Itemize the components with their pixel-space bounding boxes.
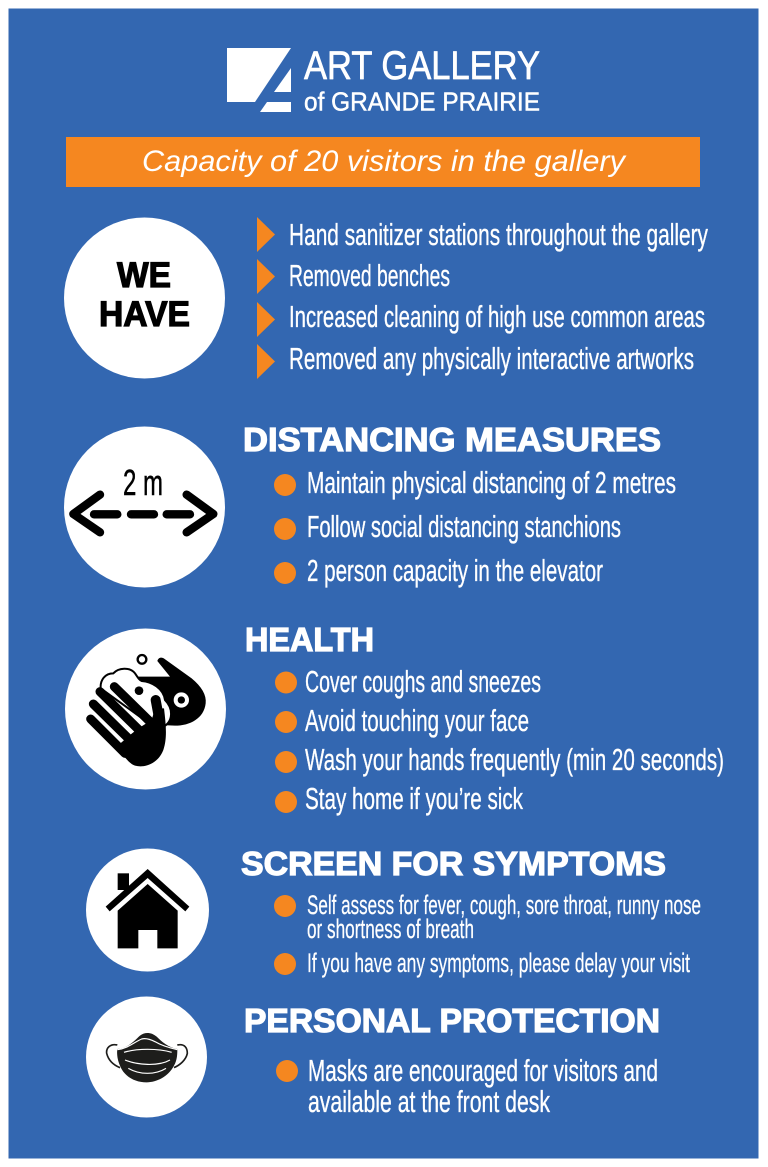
icon: we have circle: WE	[117, 256, 171, 295]
list: we have items	[257, 217, 708, 379]
icon: 2 m distance arrow	[64, 426, 225, 588]
heading: personal protection: PERSONAL PROTECTION	[244, 1002, 660, 1039]
panel: we have	[64, 217, 708, 379]
list: distancing items	[274, 465, 676, 588]
list: protection item	[276, 1053, 658, 1119]
list: protection item: available at the front desk	[308, 1084, 550, 1119]
icon: we have circle: HAVE	[99, 295, 190, 334]
list: health items	[275, 664, 724, 816]
panel: distancing measures	[64, 421, 676, 588]
logo: Art Gallery of Grande Prairie	[227, 44, 540, 116]
logo: Art Gallery of Grande Prairie: ART GALLERY	[304, 44, 540, 88]
capacity banner	[66, 137, 700, 187]
list: health items: Cover coughs and sneezes	[305, 664, 541, 699]
heading: screen for symptoms: SCREEN FOR SYMPTOMS	[241, 845, 666, 882]
list: health items: Avoid touching your face	[305, 703, 529, 738]
icon: 2 m distance arrow: 2 m	[123, 462, 163, 503]
list: health items: Stay home if you’re sick	[305, 781, 523, 816]
icon: face mask	[86, 996, 207, 1118]
list: symptom items	[274, 890, 701, 978]
heading: health: HEALTH	[245, 621, 374, 658]
panel: screen for symptoms	[86, 845, 701, 978]
panel: personal protection	[86, 996, 660, 1119]
icon: washing hands	[65, 628, 226, 790]
icon: house	[86, 848, 209, 972]
list: distancing items: 2 person capacity in the elevator	[307, 553, 603, 588]
capacity banner: Capacity of 20 visitors in the gallery	[142, 145, 627, 178]
logo: Art Gallery of Grande Prairie: of GRANDE PRAIRIE	[304, 86, 540, 116]
icon: we have circle	[64, 218, 225, 378]
panel: health	[65, 621, 724, 816]
list: we have items: Removed benches	[289, 258, 450, 293]
heading: distancing measures: DISTANCING MEASURES	[243, 421, 661, 458]
list: symptom items: or shortness of breath	[307, 914, 474, 944]
